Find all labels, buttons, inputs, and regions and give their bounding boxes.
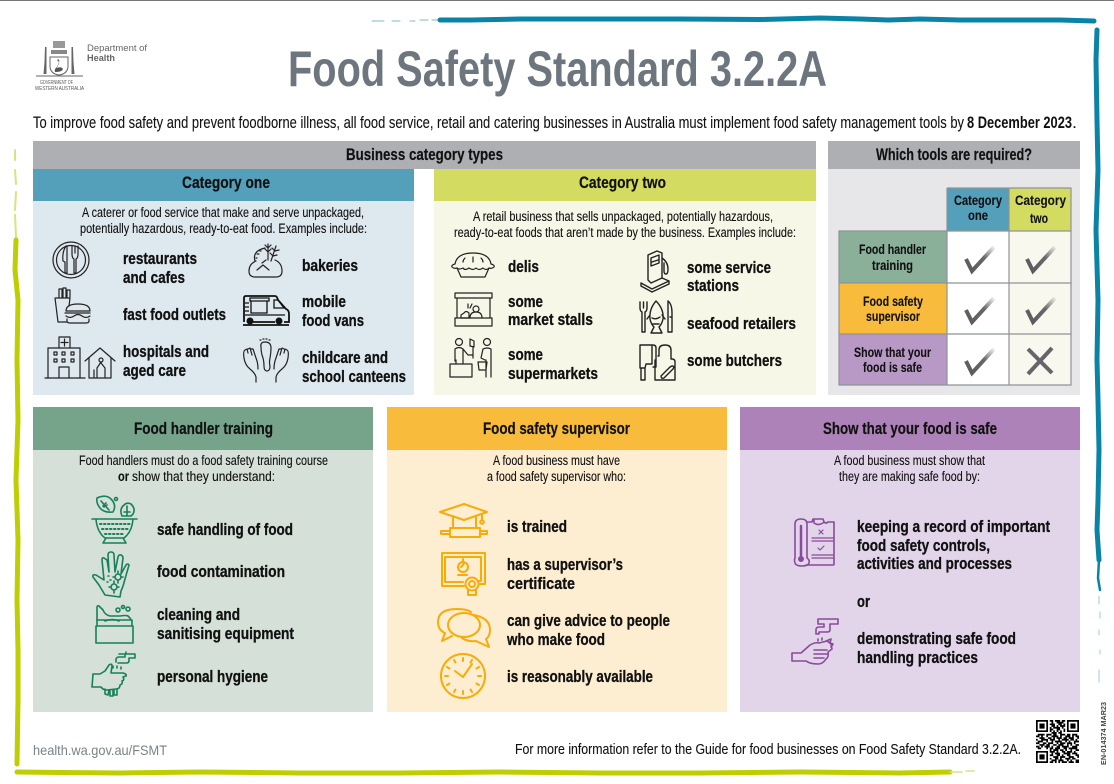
description: food safety supervisor: A food business must have (493, 453, 620, 468)
icon: market stall (455, 293, 492, 326)
description: category two (454, 209, 796, 240)
label: restaurants and cafes: restaurants (123, 250, 197, 268)
label: some service stations (687, 259, 771, 295)
icon: pie (452, 253, 494, 277)
heading: which tools are required: Which tools are required? (876, 146, 1032, 164)
icon: cleaver and board (640, 345, 675, 380)
label: keeping a record: food safety controls, (857, 537, 990, 555)
heading: category two: Category two (579, 174, 666, 192)
label: safe handling of food: safe handling of food (157, 521, 293, 539)
table: tools by category: food is safe (863, 359, 922, 375)
table: tools by category: Food safety (863, 293, 923, 309)
icon: child foot in hands (244, 339, 288, 382)
description: show that your food is safe: they are making safe food by: (839, 469, 980, 484)
label: can give advice to people who make food: can give advice to people (507, 612, 670, 630)
logo: Department of Health: WESTERN AUSTRALIA (35, 86, 84, 92)
table: tools by category (839, 188, 1071, 385)
heading: business category types: Business category types (346, 146, 503, 164)
label: cleaning and sanitising equipment: sanitising equipment (157, 625, 294, 643)
panel: category one (33, 169, 414, 395)
label: demonstrating safe food handling practices (857, 630, 1016, 667)
logo: Department of Health: Department of (87, 43, 148, 53)
label: hospitals and aged care: aged care (123, 362, 186, 380)
label: keeping a record (857, 518, 1050, 573)
text: or: or (857, 593, 870, 611)
description: category two: A retail business that sells unpackaged, potentially hazardous, (473, 209, 773, 224)
table: tools by category: one (968, 207, 988, 223)
description: show that your food is safe (834, 453, 985, 484)
icon: certificate (442, 553, 485, 595)
description: category two: ready-to-eat foods that aren’t made by the business. Examples include: (454, 225, 796, 240)
description: food safety supervisor (487, 453, 626, 484)
label: some service stations: some service (687, 259, 771, 277)
icon: graduation cap and rolling pin (440, 504, 487, 537)
icon: thermometer and clipboard (794, 519, 834, 566)
icon: contaminated hand (93, 552, 129, 597)
panel: show that your food is safe (740, 407, 1080, 712)
label: mobile food vans: mobile (302, 293, 346, 311)
panel: category two (434, 169, 816, 395)
icon: fish with cutlery (640, 301, 672, 333)
description: category one (80, 205, 367, 236)
intro text: 8 December 2023 (967, 114, 1072, 132)
table: tools by category: Food handler (859, 241, 926, 257)
label: keeping a record: activities and processes (857, 555, 1012, 573)
panel: business category types (33, 141, 816, 169)
document code, rotated: EN-014374 MAR23 (1099, 702, 1108, 765)
label: bakeries: bakeries (302, 257, 358, 275)
QR code (1036, 720, 1079, 763)
heading: category one: Category one (182, 174, 270, 192)
icon: supermarket checkout (450, 338, 491, 377)
icon: mobile food van (243, 296, 289, 325)
table: tools by category: Category (954, 192, 1002, 208)
label: food contamination: food contamination (157, 563, 285, 581)
label: some market stalls (508, 293, 593, 329)
label: some butchers: some butchers (687, 352, 782, 370)
intro text: . (1072, 114, 1077, 132)
table: tools by category: supervisor (866, 308, 920, 324)
label: personal hygiene: personal hygiene (157, 668, 268, 686)
heading: food handler training: Food handler training (134, 420, 273, 438)
label: restaurants and cafes (123, 250, 197, 287)
label: some service stations: stations (687, 277, 739, 295)
label: cleaning and sanitising equipment: cleaning and (157, 606, 240, 624)
label: restaurants and cafes: and cafes (123, 269, 185, 287)
label: has a supervisor's certificate: certificate (507, 575, 575, 593)
label: demonstrating safe food handling practices: handling practices (857, 649, 978, 667)
icon: hand washing food under tap (792, 619, 838, 664)
footer reference text: For more information refer to the Guide for food businesses on Food Safety Standard 3.2.2A. (515, 742, 1021, 758)
label: some supermarkets (508, 346, 598, 383)
label: has a supervisor's certificate: has a supervisor’s (507, 556, 623, 574)
label: mobile food vans (302, 293, 364, 330)
table: tools by category: two (1030, 210, 1048, 226)
label: is trained: is trained (507, 518, 567, 536)
description: category one: potentially hazardous, ready-to-eat food. Examples include: (80, 221, 367, 236)
label: some supermarkets: some (508, 346, 543, 364)
label: mobile food vans: food vans (302, 312, 364, 330)
label: hospitals and aged care: hospitals and (123, 343, 209, 361)
icon: speech bubbles (438, 609, 490, 647)
icon: plate and cutlery (53, 242, 89, 278)
label: keeping a record: keeping a record of important (857, 518, 1050, 536)
icon: hospital and aged care home (45, 337, 115, 378)
label: hospitals and aged care (123, 343, 209, 380)
label: can give advice to people who make food (506, 612, 670, 649)
description: category one: A caterer or food service that make and serve unpackaged, (82, 205, 364, 220)
panel: food safety supervisor (387, 407, 727, 712)
label: some supermarkets: supermarkets (508, 365, 598, 383)
label: has a supervisor's certificate (507, 556, 623, 593)
icon: bread and wheat (249, 244, 282, 277)
panel: food handler training (33, 407, 373, 712)
description: food handler training: Food handlers must do a food safety training course (79, 453, 328, 468)
logo: Department of Health (35, 41, 148, 92)
table: tools by category: Category (1015, 192, 1066, 208)
icon: fuel pump (641, 251, 669, 292)
heading: show that your food is safe: Show that your food is safe (823, 420, 997, 438)
icon: washing hands (92, 652, 135, 696)
label: delis: delis (508, 258, 539, 276)
label: some market stalls: market stalls (508, 311, 593, 329)
icon: cleaning equipment (96, 606, 133, 643)
logo: Department of Health: Health (87, 53, 115, 63)
label: demonstrating safe food handling practices: demonstrating safe food (857, 630, 1016, 648)
description: food handler training: show that they understand: (132, 469, 275, 484)
label: childcare and school canteens (302, 349, 406, 386)
label: childcare and school canteens: childcare and (302, 349, 388, 367)
description: food safety supervisor: a food safety supervisor who: (487, 469, 626, 484)
table: tools by category: training (872, 257, 913, 273)
label: fast food outlets: fast food outlets (123, 306, 226, 324)
icon: clock (441, 654, 485, 698)
label: can give advice to people who make food: who make food (506, 631, 605, 649)
footer website link: health.wa.gov.au/FSMT (33, 742, 167, 758)
description: food handler training: or (118, 469, 130, 484)
icon: fries and burger (55, 288, 90, 323)
title: Food Safety Standard 3.2.2A (288, 41, 827, 97)
label: seafood retailers: seafood retailers (687, 315, 796, 333)
table: tools by category: Show that your (854, 344, 931, 360)
label: childcare and school canteens: school canteens (302, 368, 406, 386)
label: cleaning and sanitising equipment (157, 606, 294, 643)
label: some market stalls: some (508, 293, 543, 311)
icon: colander with leaves (92, 496, 137, 543)
description: show that your food is safe: A food business must show that (834, 453, 985, 468)
heading: food safety supervisor: Food safety supervisor (483, 420, 630, 438)
description: food handler training (79, 453, 328, 484)
label: is reasonably available: is reasonably available (507, 668, 653, 686)
logo: Department of Health: GOVERNMENT OF (40, 80, 73, 86)
panel: which tools are required (828, 141, 1080, 395)
